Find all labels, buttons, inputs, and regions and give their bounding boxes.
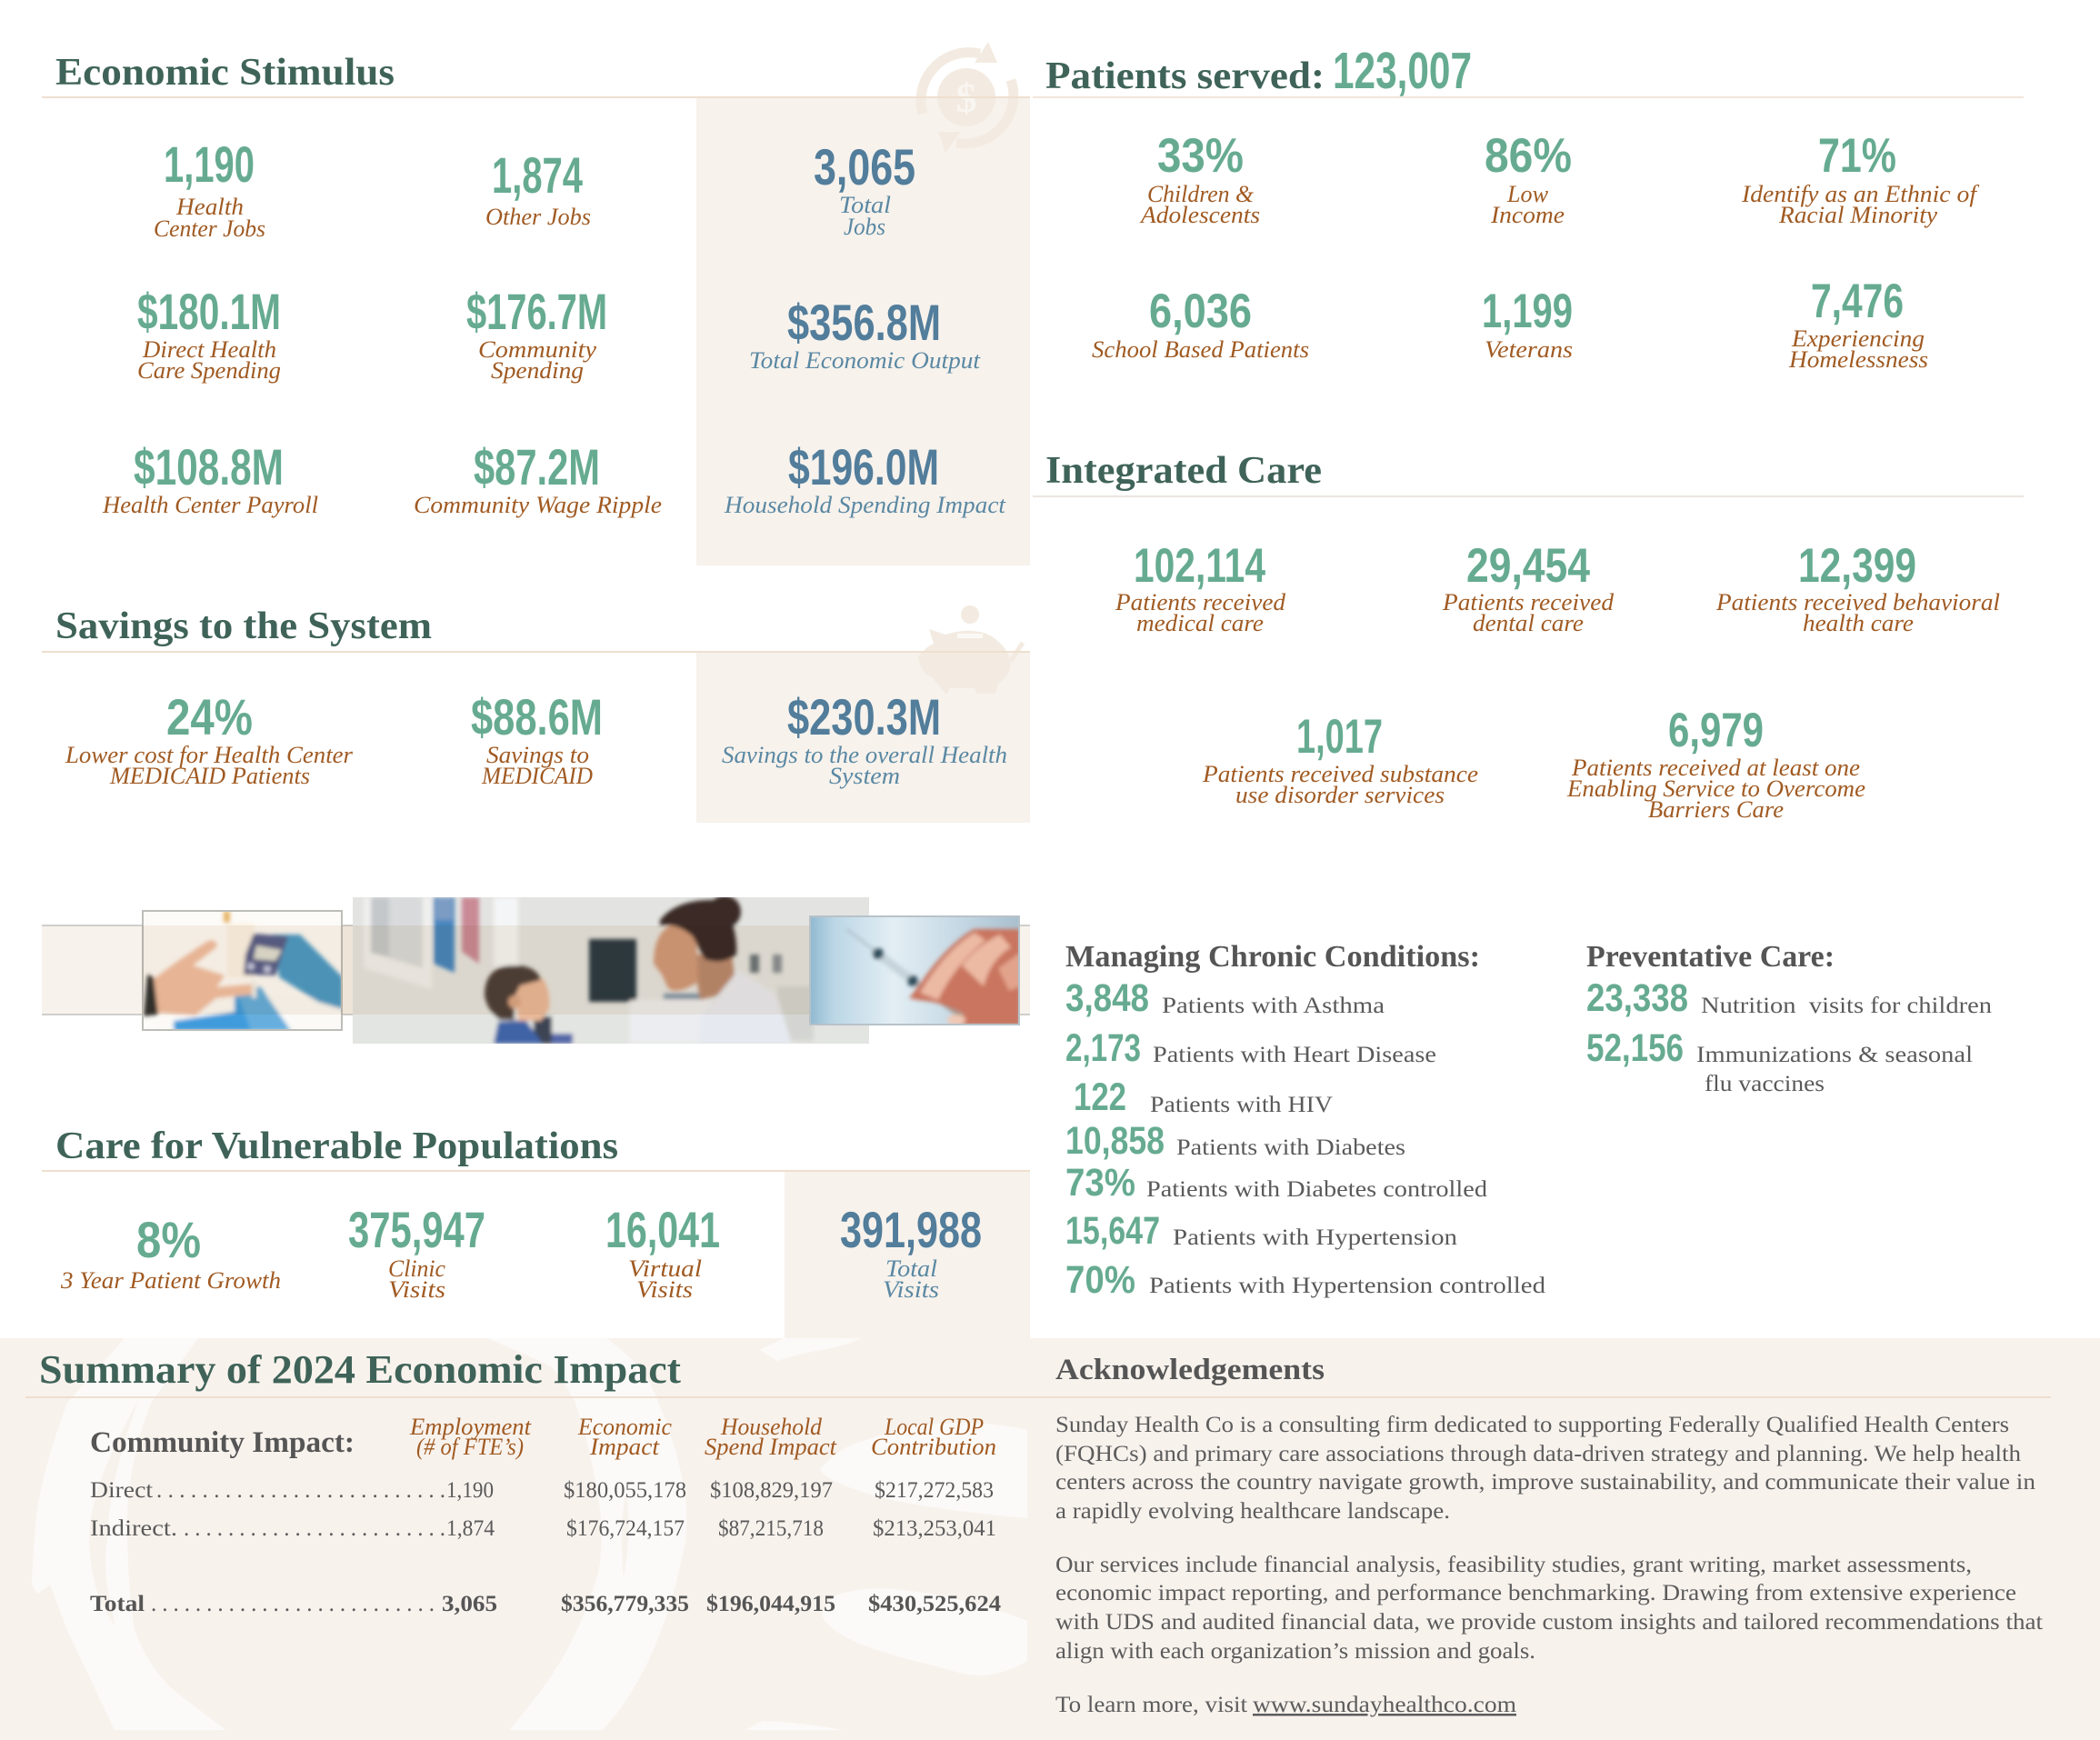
stat: enabling service: Patients received at least one (1571, 755, 1860, 781)
row: diabetes controlled: 73% (1065, 1161, 1135, 1205)
row: indirect: $176,724,157 (566, 1516, 685, 1541)
stat: total visits: Total (885, 1255, 937, 1282)
stat: total economic output: $356.8M (787, 294, 941, 351)
panel: acknowledgements (1055, 1354, 2043, 1717)
row: direct: ................ (271, 1478, 445, 1503)
table header: community impact: Community Impact: (90, 1426, 355, 1459)
stat: direct health care spending: $180.1M (137, 283, 281, 340)
stat: total jobs: Jobs (844, 214, 885, 240)
stat: other jobs (485, 146, 591, 230)
stat: direct health care spending: Care Spending (137, 357, 281, 384)
table: community impact (90, 1414, 1002, 1616)
panel: summary of economic impact (25, 1347, 2051, 1616)
stat: clinic visits (348, 1201, 485, 1303)
text block: services: Our services include financial analysis, feasibility studies, grant writing, market assessments, (1055, 1553, 1972, 1577)
stat: savings to overall system: $230.3M (787, 688, 941, 745)
icon: circular arrows with dollar: $ (956, 75, 976, 121)
stat: ethnic or racial minority: Racial Minority (1778, 202, 1937, 228)
stat: experiencing homelessness: Homelessness (1788, 346, 1928, 373)
stat: other jobs: Other Jobs (485, 204, 591, 230)
stat: community wage ripple: $87.2M (474, 438, 600, 495)
stat: enabling service: 6,979 (1668, 704, 1764, 757)
row: immunizations: flu vaccines (1705, 1072, 1825, 1096)
stat: experiencing homelessness: Experiencing (1791, 325, 1925, 352)
text block: about: centers across the country navigate growth, improve sustainability, and communicate their value in (1055, 1470, 2036, 1495)
stat: community spending: Spending (491, 357, 584, 384)
stat: health center jobs: Health (175, 194, 244, 220)
row: HIV: Patients with HIV (1150, 1093, 1333, 1117)
stat: low income: Low (1506, 181, 1549, 207)
stat: clinic visits: Visits (388, 1276, 445, 1303)
stat: school based patients: School Based Patients (1092, 336, 1309, 363)
stat: dental care: 29,454 (1466, 539, 1590, 593)
row: diabetes: 10,858 (1065, 1119, 1165, 1163)
stat: savings to medicaid: $88.6M (471, 688, 603, 745)
stat: clinic visits: 375,947 (348, 1201, 485, 1258)
column header: economic impact: Impact (589, 1434, 660, 1460)
stat: enabling service: Enabling Service to Overcome (1566, 775, 1865, 802)
stat: school based patients: 6,036 (1149, 285, 1252, 338)
heading: Patients served: 123,007 (1333, 42, 1472, 100)
stat: total jobs (814, 138, 915, 240)
row: asthma: Patients with Asthma (1162, 994, 1385, 1018)
stat: virtual visits: Virtual (628, 1255, 702, 1282)
stat: total visits: Visits (883, 1276, 939, 1303)
row: direct: $180,055,178 (564, 1478, 686, 1503)
heading: Managing Chronic Conditions: Managing Chronic Conditions: (1065, 940, 1480, 974)
stat: ethnic or racial minority: 71% (1818, 129, 1896, 183)
row: HIV (1074, 1075, 1333, 1119)
stat: savings to medicaid (471, 688, 603, 789)
panel: savings highlight (696, 652, 1030, 823)
icon: piggy bank (918, 605, 1023, 694)
stat: substance use disorder (1202, 710, 1478, 808)
stat: community wage ripple: Community Wage Ripple (414, 492, 662, 518)
row: nutrition visits: 23,338 (1586, 976, 1688, 1020)
row: direct: $217,272,583 (875, 1478, 994, 1503)
stat: household spending impact (724, 438, 1006, 518)
row: diabetes (1065, 1119, 1405, 1163)
row: diabetes controlled: Patients with Diabetes controlled (1146, 1177, 1488, 1202)
row: direct (90, 1478, 994, 1503)
stat: behavioral health care: 12,399 (1798, 539, 1916, 593)
text block: services: with UDS and audited financial data, we provide custom insights and tailored recommendations that (1055, 1610, 2043, 1635)
stat: children and adolescents: 33% (1157, 129, 1244, 183)
stat: community spending (466, 283, 607, 384)
row: hypertension: Patients with Hypertension (1173, 1225, 1458, 1250)
panel: patients served (1033, 42, 2024, 373)
row: immunizations: 52,156 (1586, 1026, 1684, 1070)
heading: Preventative Care: Preventative Care: (1586, 940, 1835, 974)
stat: total jobs: Total (839, 192, 891, 218)
row: indirect: 1,874 (446, 1516, 495, 1541)
stat: patient growth (60, 1211, 281, 1294)
row: asthma (1065, 976, 1385, 1020)
row: direct: $108,829,197 (710, 1478, 833, 1503)
panel: preventative care (1586, 940, 1993, 1096)
stat: total economic output (749, 294, 981, 374)
row: total: $356,779,335 (561, 1592, 689, 1616)
panel: savings to the system (42, 605, 1030, 823)
panel: integrated care (1033, 450, 2024, 823)
stat: experiencing homelessness (1788, 275, 1928, 373)
column header: local GDP contribution (871, 1414, 996, 1460)
row: total: $430,525,624 (868, 1592, 1002, 1616)
heading: Economic Stimulus: Economic Stimulus (55, 52, 395, 94)
stat: savings to medicaid: MEDICAID (481, 763, 593, 789)
photo band (42, 895, 1030, 1044)
row: indirect: Indirect. (90, 1516, 177, 1541)
row: immunizations: Immunizations & seasonal (1696, 1043, 1973, 1067)
stat: experiencing homelessness: 7,476 (1811, 275, 1904, 328)
stat: virtual visits: Visits (636, 1276, 693, 1303)
column header: economic impact: Economic (577, 1414, 672, 1440)
stat: lower cost: 24% (166, 688, 253, 745)
stat: dental care (1442, 539, 1615, 636)
stat: enabling service (1566, 704, 1865, 823)
row: direct: 1,190 (446, 1478, 494, 1503)
stat: other jobs: 1,874 (492, 146, 583, 204)
stat: lower cost: Lower cost for Health Center (65, 742, 354, 768)
row: total: Total (90, 1592, 145, 1616)
stat: direct health care spending: Direct Health (142, 336, 276, 363)
stat: substance use disorder: use disorder services (1235, 782, 1445, 808)
stat: dental care: Patients received (1442, 589, 1615, 615)
text block: services: economic impact reporting, and performance benchmarking. Drawing from extensive experience (1055, 1581, 2016, 1605)
row: total (90, 1592, 1002, 1616)
row: direct: .......... (156, 1478, 265, 1503)
photo: glucose test (142, 910, 343, 1031)
text block: about: a rapidly evolving healthcare landscape. (1055, 1499, 1450, 1524)
stat: virtual visits: 16,041 (605, 1201, 720, 1258)
column header: household spend impact (705, 1414, 837, 1460)
text block: services (1055, 1553, 2043, 1664)
stat: health center payroll: $108.8M (134, 438, 284, 495)
stat: household spending impact: $196.0M (788, 438, 939, 495)
panel: bottom section background (0, 1338, 2100, 1740)
stat: community spending: Community (478, 336, 596, 363)
stat: patient growth: 8% (136, 1211, 201, 1268)
stat: medical care: medical care (1136, 610, 1264, 636)
heading: Patients served: Patients served: (1045, 55, 1325, 97)
stat: household spending impact: Household Spending Impact (724, 492, 1006, 518)
panel: managing chronic conditions (1065, 940, 1546, 1302)
row: nutrition visits: Nutrition visits for children (1701, 994, 1993, 1018)
stat: total visits (840, 1201, 982, 1303)
stat: health center payroll: Health Center Payroll (102, 492, 318, 518)
overlay: band tint over photos (142, 925, 869, 1015)
panel: care for vulnerable populations (42, 1125, 1030, 1340)
stat: children and adolescents: Adolescents (1139, 202, 1260, 228)
row: hypertension: 15,647 (1065, 1209, 1160, 1253)
stat: ethnic or racial minority: Identify as an Ethnic of (1741, 181, 1980, 207)
stat: enabling service: Barriers Care (1648, 796, 1784, 823)
stat: medical care (1115, 539, 1286, 636)
text block: learn more: www.sundayhealthco.com (1253, 1693, 1517, 1717)
text block: about: (FQHCs) and primary care associations through data-driven strategy and planning. We help health (1055, 1442, 2022, 1466)
stat: total visits: 391,988 (840, 1201, 982, 1258)
text block: about: Sunday Health Co is a consulting firm dedicated to supporting Federally Qualified Health Centers (1055, 1413, 2009, 1437)
stat: veterans: Veterans (1485, 336, 1573, 363)
stat: low income (1485, 129, 1572, 228)
stat: community spending: $176.7M (466, 283, 607, 340)
column header: household spend impact: Household (720, 1414, 823, 1440)
row: hypertension controlled: 70% (1065, 1258, 1135, 1302)
row: immunizations (1586, 1026, 1973, 1096)
stat: veterans (1482, 285, 1573, 363)
heading: Savings to the System: Savings to the System (55, 605, 432, 647)
stat: savings to overall system: System (829, 763, 900, 789)
heading: Care for Vulnerable Populations: Care for Vulnerable Populations (55, 1125, 618, 1167)
row: total: $196,044,915 (706, 1592, 835, 1616)
column header: employment (409, 1414, 532, 1460)
row: diabetes controlled (1065, 1161, 1488, 1205)
stat: health center jobs (154, 135, 265, 242)
row: indirect (90, 1516, 996, 1541)
row: hypertension (1065, 1209, 1458, 1253)
column header: employment: (# of FTE’s) (416, 1434, 524, 1460)
column header: employment: Employment (409, 1414, 532, 1440)
row: total: .......................... (151, 1592, 435, 1616)
panel: totals highlight (696, 97, 1030, 565)
text block: learn more: To learn more, visit (1055, 1693, 1247, 1717)
row: heart disease (1065, 1026, 1436, 1070)
stat: savings to medicaid: Savings to (486, 742, 589, 768)
heading: Patients served (1045, 42, 1472, 100)
row: indirect: $87,215,718 (718, 1516, 824, 1541)
stat: lower cost (65, 688, 354, 789)
stat: behavioral health care: health care (1803, 610, 1914, 636)
row: heart disease: Patients with Heart Disease (1153, 1043, 1436, 1067)
photo: syringe (809, 915, 1020, 1025)
row: hypertension controlled: Patients with Hypertension controlled (1149, 1274, 1546, 1298)
stat: health center jobs: Center Jobs (154, 215, 265, 242)
stat: savings to overall system: Savings to the overall Health (722, 742, 1007, 768)
heading: Integrated Care: Integrated Care (1045, 450, 1322, 492)
decorative swirl strokes (32, 1338, 1027, 1730)
panel: economic stimulus (42, 42, 1030, 565)
stat: low income: 86% (1485, 129, 1572, 183)
row: nutrition visits (1586, 976, 1993, 1020)
row: asthma: 3,848 (1065, 976, 1149, 1020)
row: diabetes: Patients with Diabetes (1176, 1135, 1405, 1160)
stat: total economic output: Total Economic Output (749, 347, 981, 374)
column header: local GDP contribution: Local GDP (884, 1414, 984, 1440)
text block: learn more (1055, 1693, 1517, 1717)
stat: total jobs: 3,065 (814, 138, 915, 195)
stat: savings to overall system (722, 688, 1007, 789)
row: total: 3,065 (442, 1592, 497, 1616)
stat: substance use disorder: 1,017 (1296, 710, 1383, 764)
stat: health center payroll (102, 438, 318, 518)
stat: school based patients (1092, 285, 1309, 363)
heading: Summary: Summary of 2024 Economic Impact (39, 1347, 681, 1392)
photo: doctor and child (353, 895, 869, 1044)
row: indirect: $213,253,041 (873, 1516, 996, 1541)
row: heart disease: 2,173 (1065, 1026, 1141, 1070)
stat: ethnic or racial minority (1741, 129, 1980, 228)
stat: medical care: 102,114 (1134, 539, 1265, 593)
stat: patient growth: 3 Year Patient Growth (60, 1267, 281, 1294)
column header: economic impact (577, 1414, 672, 1460)
stat: children and adolescents: Children & (1147, 181, 1255, 207)
stat: health center jobs: 1,190 (164, 135, 255, 193)
column header: local GDP contribution: Contribution (871, 1434, 996, 1460)
stat: behavioral health care (1715, 539, 2000, 636)
stat: substance use disorder: Patients received substance (1202, 761, 1478, 787)
text block: about (1055, 1413, 2036, 1524)
decorative slivers (89, 1400, 629, 1625)
heading: Acknowledgements: Acknowledgements (1055, 1354, 1325, 1386)
stat: lower cost: MEDICAID Patients (109, 763, 310, 789)
row: hypertension controlled (1065, 1258, 1546, 1302)
stat: virtual visits (605, 1201, 720, 1303)
stat: children and adolescents (1139, 129, 1260, 228)
stat: medical care: Patients received (1115, 589, 1286, 615)
icon: circular arrows with dollar (921, 42, 1014, 153)
stat: low income: Income (1490, 202, 1565, 228)
stat: direct health care spending (137, 283, 281, 384)
stat: behavioral health care: Patients received behavioral (1715, 589, 2000, 615)
stat: community wage ripple (414, 438, 662, 518)
stat: clinic visits: Clinic (388, 1255, 445, 1282)
row: indirect: ........................ (184, 1516, 445, 1541)
row: direct: Direct (90, 1478, 153, 1503)
stat: dental care: dental care (1473, 610, 1584, 636)
text block: services: align with each organization’s mission and goals. (1055, 1639, 1535, 1664)
stat: veterans: 1,199 (1482, 285, 1573, 338)
panel: total visits highlight (785, 1171, 1030, 1340)
row: HIV: 122 (1074, 1075, 1126, 1119)
column header: household spend impact: Spend Impact (705, 1434, 837, 1460)
